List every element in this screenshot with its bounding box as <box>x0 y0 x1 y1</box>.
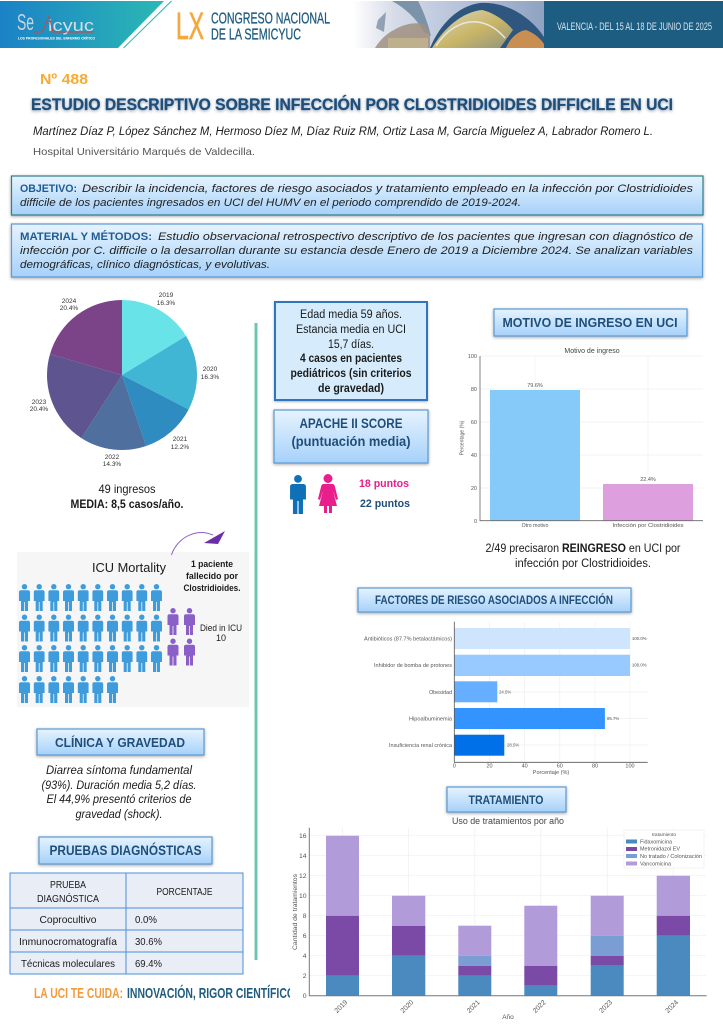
panel: objetivo: difficile de los pacientes ingresados en UCI del HUMV en el periodo comprendido de 2019-2024. <box>20 197 521 209</box>
pie chart: ingresos por año: 16.3% <box>201 374 219 381</box>
building photo <box>353 1 544 48</box>
bar chart: factores de riesgo: 100.0% <box>632 636 647 641</box>
bar chart: motivo de ingreso: Otro motivo <box>522 523 549 529</box>
bar chart: factores de riesgo: 28.5% <box>507 742 519 748</box>
bar chart: motivo de ingreso: 60 <box>471 420 477 426</box>
bar 2023 <box>591 896 624 996</box>
congress name <box>176 6 330 48</box>
panel: demographics: pediátricos (sin criterios <box>290 368 412 380</box>
panel: demographics: 4 casos en pacientes <box>300 353 402 365</box>
semicyuc logo: icyuc <box>48 16 95 35</box>
bar chart: factores de riesgo: 20 <box>486 764 493 770</box>
pictogram: survivors <box>19 584 162 703</box>
text: clínica <box>42 765 196 821</box>
table: pruebas diagnósticas: 0.0% <box>135 914 157 926</box>
table: pruebas diagnósticas: 30.6% <box>135 936 162 948</box>
reingreso note <box>486 543 681 570</box>
stacked bar chart: tratamiento: Año <box>502 1014 514 1021</box>
heading: clínica y gravedad <box>37 729 204 755</box>
callout: 1 paciente: 1 paciente <box>191 559 233 570</box>
stacked bar chart: tratamiento: 2023 <box>598 999 614 1015</box>
bar 2022 <box>524 906 557 996</box>
pie caption <box>70 482 184 511</box>
panel: objetivo: OBJETIVO: <box>20 183 77 195</box>
text: clínica: gravedad (shock). <box>76 809 162 821</box>
bar chart: factores de riesgo: Inhibidor de bomba de protones <box>374 663 452 669</box>
died in icu: Died in ICU <box>200 623 242 633</box>
reingreso note: infección por Clostridioides. <box>515 558 651 570</box>
heading: apache <box>274 410 428 463</box>
bar chart: factores de riesgo: 0 <box>453 764 456 770</box>
footer slogan: INNOVACIÓN, RIGOR CIENTÍFICO <box>127 984 295 1002</box>
panel: demographics: de gravedad) <box>318 383 384 395</box>
stacked bar chart: tratamiento: 6 <box>303 933 307 940</box>
bar chart: motivo de ingreso: Motivo de ingreso <box>564 348 620 355</box>
callout: 1 paciente: fallecido por <box>186 571 238 582</box>
bar chart: factores de riesgo: 40 <box>522 764 528 770</box>
heading: tratamiento <box>447 787 566 812</box>
abstract number: Nº 488 <box>40 71 88 88</box>
legend <box>624 830 704 868</box>
stacked bar chart: tratamiento: 10 <box>299 893 307 900</box>
bar chart: motivo de ingreso: Percentage (%) <box>460 420 466 455</box>
semicyuc logo: Se <box>17 9 34 35</box>
bar 2021 <box>458 926 491 996</box>
bar chart: motivo de ingreso: 0 <box>474 519 477 525</box>
footer slogan: LA UCI TE CUIDA: <box>34 985 123 1002</box>
text: clínica: (93%). Duración media 5,2 días. <box>42 780 196 792</box>
pie chart: ingresos por año: 2024 <box>62 298 77 305</box>
pie chart: ingresos por año: 2020 <box>203 366 218 373</box>
table: pruebas diagnósticas: PRUEBA <box>50 879 86 891</box>
stacked bar chart: tratamiento: 2020 <box>400 999 415 1015</box>
bar chart: motivo de ingreso: 80 <box>471 387 477 393</box>
bar 2020 <box>392 896 425 996</box>
bar chart: factores de riesgo: 100 <box>625 764 635 770</box>
bar chart: factores de riesgo: 100.0% <box>632 662 647 668</box>
semicyuc logo: LOS PROFESIONALES DEL ENFERMO CRÍTICO <box>18 36 95 40</box>
icon: man <box>290 475 306 514</box>
heading: factores de riesgo: FACTORES DE RIESGO ASOCIADOS A INFECCIÓN <box>375 594 613 607</box>
panel: objetivo: Describir la incidencia, factores de riesgo asociados y tratamiento empleado en la infección por Clostridioides <box>82 183 694 195</box>
panel: objetivo <box>12 176 703 215</box>
panel: icu mortality: ICU Mortality <box>92 560 166 575</box>
apache scores: 22 puntos <box>360 498 410 510</box>
bar chart: motivo de ingreso: 79.6% <box>527 383 543 389</box>
heading: tratamiento: TRATAMIENTO <box>468 793 544 807</box>
pie chart: ingresos por año <box>30 292 219 468</box>
legend: Vancomicina <box>640 862 671 868</box>
stacked bar chart: tratamiento: Cantidad de tratamientos <box>292 873 299 950</box>
pie chart: ingresos por año: 12.2% <box>171 444 189 451</box>
bar chart: motivo de ingreso: 22.4% <box>640 477 656 483</box>
callout: 1 paciente <box>184 559 240 594</box>
pie caption: 49 ingresos <box>98 482 156 496</box>
pie chart: ingresos por año: 20.4% <box>60 305 78 312</box>
heading: pruebas diagnósticas <box>39 837 212 864</box>
callout: 1 paciente: Clostridioides. <box>184 583 240 594</box>
bar chart: motivo de ingreso: 40 <box>471 453 477 459</box>
pie caption: MEDIA: 8,5 casos/año. <box>70 497 184 511</box>
stacked bar chart: tratamiento: 0 <box>303 993 307 1000</box>
heading: apache: (puntuación media) <box>292 434 410 449</box>
reingreso note: 2/49 precisaron REINGRESO en UCI por <box>486 543 681 555</box>
bar chart: factores de riesgo: Obesidad <box>429 690 452 696</box>
bar chart: factores de riesgo: 80 <box>592 764 598 770</box>
panel: material y métodos <box>12 224 702 277</box>
stacked bar chart: tratamiento: 2022 <box>532 999 548 1015</box>
died in icu: 10 <box>216 633 226 643</box>
bar 2024 <box>657 876 690 996</box>
table: pruebas diagnósticas: Inmunocromatografía <box>19 936 117 948</box>
stacked bar chart: tratamiento: 2021 <box>466 999 482 1015</box>
pie chart: ingresos por año: 2021 <box>173 436 188 443</box>
table: pruebas diagnósticas: Coprocultivo <box>40 914 97 926</box>
bar chart: motivo de ingreso: 20 <box>471 486 477 492</box>
pie chart: ingresos por año: 20.4% <box>30 406 48 413</box>
arrow: mortality callout <box>172 531 225 555</box>
heading: pruebas diagnósticas: PRUEBAS DIAGNÓSTICAS <box>50 843 202 858</box>
bar chart: motivo de ingreso: Infección por Clostridioides <box>612 523 684 529</box>
heading: apache: APACHE II SCORE <box>300 416 402 431</box>
legend: Metronidazol EV <box>640 846 681 852</box>
text: clínica: Diarrea síntoma fundamental <box>46 765 192 777</box>
bar chart: factores de riesgo: Antibióticos (87.7% betalactámicos) <box>364 636 452 642</box>
heading: factores de riesgo <box>358 588 631 612</box>
died in icu <box>200 623 242 643</box>
congress name: DE LA SEMICYUC <box>211 26 301 44</box>
footer slogan <box>34 984 290 1000</box>
semicyuc logo <box>17 9 95 40</box>
panel: demographics <box>275 302 427 400</box>
stacked bar chart: tratamiento: 2 <box>303 973 307 980</box>
hospital: Hospital Universitário Marqués de Valdecilla. <box>33 146 255 158</box>
stacked bar chart: tratamiento: 12 <box>299 873 307 880</box>
pie chart: ingresos por año: 16.3% <box>157 300 175 307</box>
table: pruebas diagnósticas: PORCENTAJE <box>156 886 212 898</box>
icon: woman <box>318 474 338 513</box>
stacked bar chart: tratamiento: 2019 <box>334 999 349 1015</box>
panel: material y métodos: Estudio observacional retrospectivo descriptivo de los pacientes que ingresan con diagnóstico de <box>158 231 693 243</box>
date band <box>544 1 723 48</box>
heading: motivo de ingreso <box>494 309 687 336</box>
panel: material y métodos: demográficas, clínico diagnósticas, y evolutivas. <box>20 259 270 271</box>
apache scores <box>359 478 410 510</box>
authors: Martínez Díaz P, López Sánchez M, Hermoso Díez M, Díaz Ruiz RM, Ortiz Lasa M, García Miguelez A, Labrador Romero L. <box>33 126 653 138</box>
stacked bar chart: tratamiento: 16 <box>299 833 307 840</box>
legend: No tratado / Colonización <box>640 854 702 860</box>
header banner <box>0 0 723 49</box>
bar chart: motivo de ingreso: 100 <box>468 354 477 360</box>
text: clínica: El 44,9% presentó criterios de <box>46 794 192 806</box>
vertical divider <box>254 323 258 960</box>
panel: material y métodos: MATERIAL Y MÉTODOS: <box>20 230 152 243</box>
stacked bar chart: tratamiento: 4 <box>303 953 307 960</box>
stacked bar chart: tratamiento <box>292 816 707 1021</box>
bar chart: factores de riesgo <box>364 622 648 776</box>
heading: clínica y gravedad: CLÍNICA Y GRAVEDAD <box>55 735 185 750</box>
panel: demographics: 15,7 días. <box>328 339 374 351</box>
table: pruebas diagnósticas <box>10 873 243 974</box>
bar chart: factores de riesgo: 85.7% <box>607 716 619 721</box>
congress name: LX <box>176 6 204 48</box>
table: pruebas diagnósticas: Técnicas moleculares <box>21 958 115 970</box>
panel: demographics: Estancia media en UCI <box>296 324 406 336</box>
bar chart: factores de riesgo: 24.5% <box>499 690 511 694</box>
panel: demographics: Edad media 59 años. <box>300 309 402 321</box>
stacked bar chart: tratamiento: Uso de tratamientos por año <box>452 816 564 826</box>
panel: icu mortality <box>17 552 249 707</box>
bar chart: motivo de ingreso <box>460 348 703 529</box>
apache scores: 18 puntos <box>359 478 409 490</box>
bar 2019 <box>326 836 359 996</box>
bar chart: factores de riesgo: Hipoalbuminemia <box>409 716 453 722</box>
table: pruebas diagnósticas: DIAGNÓSTICA <box>37 892 99 905</box>
legend: tratamiento <box>652 832 676 838</box>
title: ESTUDIO DESCRIPTIVO SOBRE INFECCIÓN POR CLOSTRIDIOIDES DIFFICILE EN UCI <box>31 95 673 114</box>
bar chart: factores de riesgo: 60 <box>557 764 563 770</box>
bar chart: factores de riesgo: Porcentaje (%) <box>533 770 569 776</box>
congress name: CONGRESO NACIONAL <box>211 10 330 28</box>
stacked bar chart: tratamiento: 14 <box>299 853 307 860</box>
pie chart: ingresos por año: 2019 <box>159 292 174 299</box>
table: pruebas diagnósticas: 69.4% <box>135 958 162 970</box>
heading: motivo de ingreso: MOTIVO DE INGRESO EN UCI <box>502 315 678 330</box>
stacked bar chart: tratamiento: 2024 <box>664 999 680 1015</box>
stacked bar chart: tratamiento: 8 <box>303 913 307 920</box>
pie chart: ingresos por año: 14.3% <box>103 461 121 468</box>
bar chart: factores de riesgo: Insuficiencia renal crónica <box>389 743 453 749</box>
panel: material y métodos: infección por C. difficile o la desarrollan durante su estancia desde Enero de 2019 a Diciembre 2024. Se analizan variables <box>20 245 694 257</box>
pie chart: ingresos por año: 2023 <box>32 399 47 406</box>
pie chart: ingresos por año: 2022 <box>105 454 120 461</box>
pictogram: deaths <box>168 608 195 666</box>
legend: Fidaxomicina <box>640 840 672 846</box>
congress logo block <box>0 1 164 48</box>
